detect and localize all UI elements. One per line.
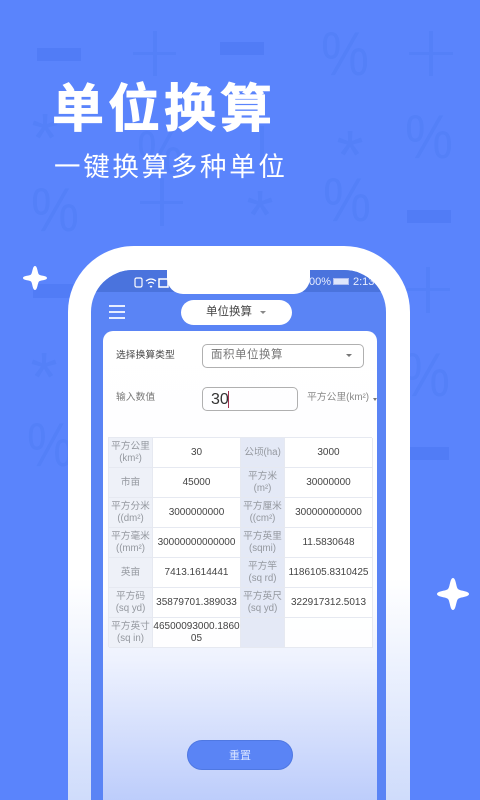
value input <box>202 387 298 411</box>
row 3: ((cm²) <box>250 512 275 524</box>
row 7: 05 <box>191 632 202 644</box>
row 6: (sq yd) <box>248 602 277 614</box>
row 2 <box>109 468 373 498</box>
background math symbols: % <box>405 103 453 172</box>
row 4: 平方毫米 <box>111 531 150 542</box>
row 3: 平方厘米 <box>243 501 282 512</box>
row 1 <box>109 438 373 468</box>
row 2: 45000 <box>183 477 210 488</box>
phone screen <box>91 270 386 800</box>
row 6: 322917312.5013 <box>291 597 366 608</box>
status icons left <box>134 277 169 288</box>
unit select: 平方公里(km²) <box>307 392 369 403</box>
background math symbols: * <box>246 176 274 254</box>
row 5: 1186105.8310425 <box>289 567 368 578</box>
row 6: (sq yd) <box>116 602 145 614</box>
row 7: 46500093000.1860 <box>153 621 240 632</box>
icon: battery <box>333 278 349 285</box>
status text right: 00% <box>309 276 331 288</box>
background math symbols: % <box>31 176 79 245</box>
background math symbols: * <box>30 338 58 416</box>
label: conversion type: 选择换算类型 <box>116 350 175 361</box>
row 5: 英亩 <box>121 567 140 578</box>
background math symbols: % <box>27 411 73 480</box>
row 7: 平方英寸 <box>111 621 150 632</box>
row 1: (km²) <box>119 452 142 464</box>
row 6: 35879701.389033 <box>156 597 237 608</box>
row 4: 30000000000000 <box>158 537 235 548</box>
row 3: ((dm²) <box>117 512 144 524</box>
icon: sparkle left <box>23 266 47 290</box>
row 1: 公顷(ha) <box>244 447 281 458</box>
background math symbols: % <box>137 119 183 188</box>
row 6: 平方英尺 <box>243 591 282 602</box>
row 5: 平方竿 <box>248 561 277 572</box>
row 4: (sqmi) <box>249 542 276 554</box>
row 6 <box>109 588 373 618</box>
background math symbols: % <box>323 166 371 235</box>
row 2: 30000000 <box>306 477 351 488</box>
phone mockup <box>68 246 410 800</box>
conversion type select: 面积单位换算 <box>211 349 283 361</box>
phone notch <box>167 268 310 294</box>
row 5: (sq rd) <box>248 572 276 584</box>
dropdown header pill <box>181 300 292 325</box>
icon: sparkle right <box>437 578 469 610</box>
row 7 <box>109 618 373 648</box>
reset button: 重置 <box>229 750 251 762</box>
row 5: 7413.1614441 <box>165 567 228 578</box>
background math symbols: % <box>402 341 450 410</box>
reset button <box>187 740 293 770</box>
row 2: (m²) <box>254 482 271 494</box>
status clock: 2:13 <box>353 276 374 288</box>
row 4: 11.5830648 <box>302 537 355 548</box>
icon: menu <box>109 305 125 319</box>
row 2: 平方米 <box>248 471 277 482</box>
title: 单位换算 <box>52 81 276 139</box>
unit arrow <box>373 398 377 401</box>
background math symbols: % <box>321 20 369 89</box>
subtitle: 一键换算多种单位 <box>54 152 288 182</box>
row 3 <box>109 498 373 528</box>
row 7: (sq in) <box>117 632 144 644</box>
row 4 <box>109 528 373 558</box>
status bar <box>91 270 386 292</box>
row 4: ((mm²) <box>116 542 145 554</box>
background math symbols: * <box>31 99 59 177</box>
row 1: 平方公里 <box>111 441 150 452</box>
row 1: 3000 <box>317 447 340 458</box>
row 4: 平方英里 <box>243 531 282 542</box>
main card <box>103 331 377 800</box>
value input: 30 <box>211 391 229 408</box>
background math symbols: * <box>336 116 364 194</box>
row 6: 平方码 <box>116 591 145 602</box>
dropdown header pill: 单位换算 <box>206 306 252 318</box>
row 3: 300000000000 <box>295 507 362 518</box>
row 1: 30 <box>191 447 202 458</box>
row 5 <box>109 558 373 588</box>
conversion table <box>108 437 372 647</box>
label: input value: 输入数值 <box>116 392 155 403</box>
row 2: 市亩 <box>121 477 140 488</box>
row 3: 3000000000 <box>169 507 224 518</box>
row 3: 平方分米 <box>111 501 150 512</box>
conversion type select <box>202 344 364 368</box>
